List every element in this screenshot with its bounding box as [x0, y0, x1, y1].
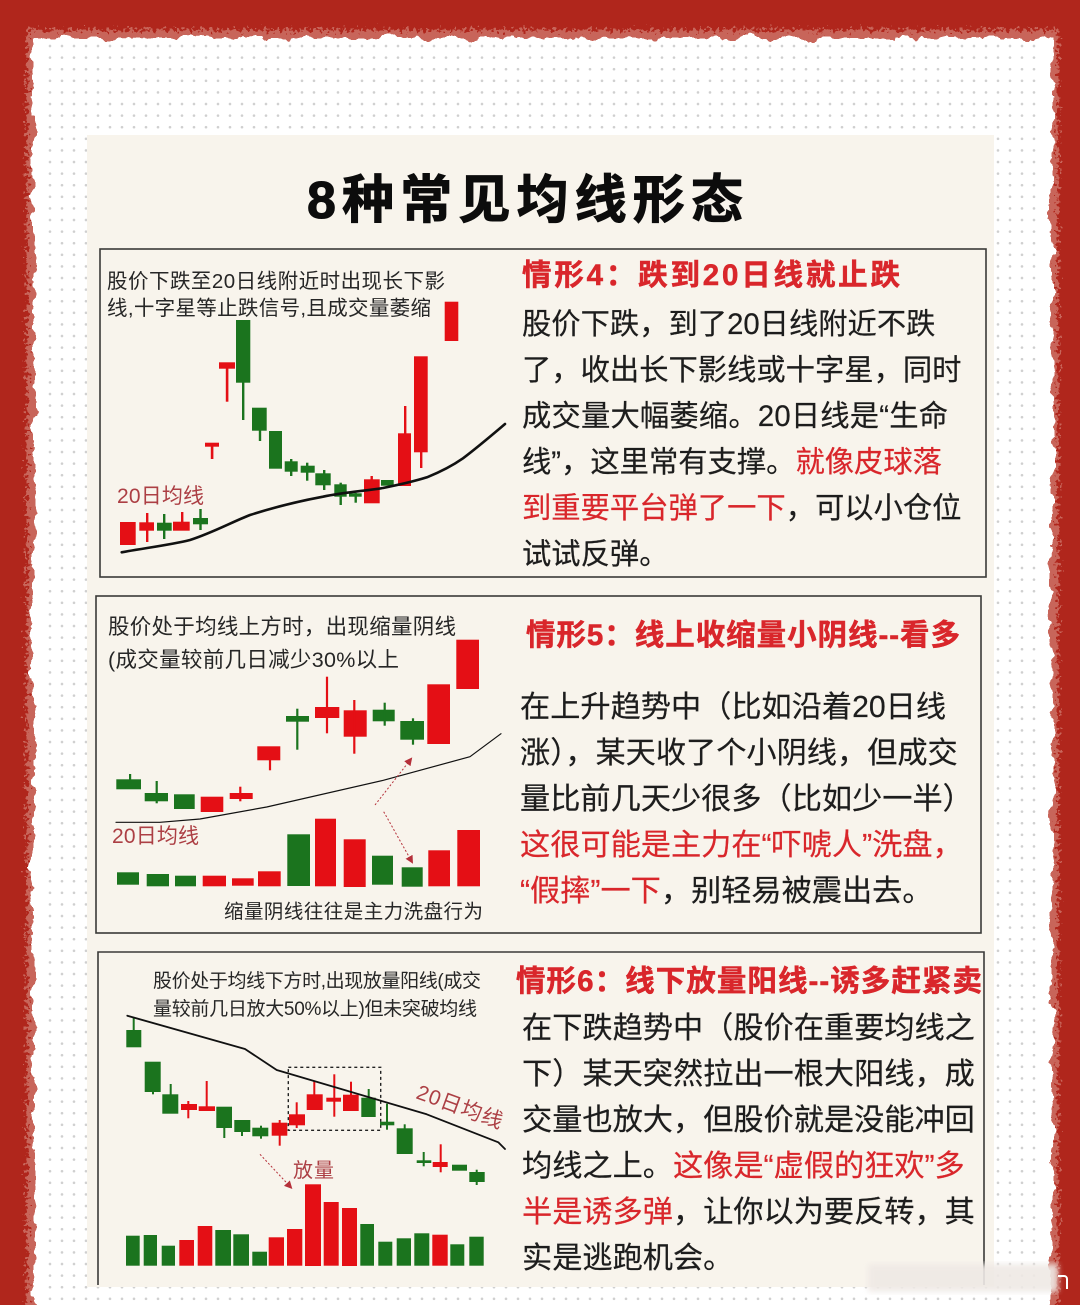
- chart note 5: 缩量阴线往往是主力洗盘行为: [224, 901, 483, 923]
- body text 4: 股价下跌，到了20日线附近不跌: [522, 308, 935, 341]
- body text 6: 在下跌趋势中（股价在重要均线之: [522, 1011, 975, 1045]
- heading 6: 情形6：线下放量阳线--诱多赶紧卖: [516, 965, 982, 998]
- body text 4: 试试反弹。: [522, 538, 668, 571]
- chart annotation 6: 量较前几日放大50%以上)但未突破均线: [153, 998, 477, 1020]
- moving average line 4: [122, 424, 505, 552]
- label: 20-day moving average: 20日均线: [112, 825, 199, 848]
- body text 6: 半是诱多弹，让你以为要反转，其: [522, 1195, 975, 1229]
- chart annotation 5: [108, 615, 456, 672]
- body text 4: 到重要平台弹了一下，可以小仓位: [522, 492, 961, 525]
- body text 5: 涨），某天收了个小阴线，但成交: [520, 736, 958, 770]
- volume bars 6: [126, 1184, 484, 1266]
- body text 4: 成交量大幅萎缩。20日线是“生命: [522, 400, 948, 433]
- body text 6: 实是逃跑机会。: [522, 1241, 733, 1275]
- body text 6: [522, 1011, 975, 1275]
- chart annotation 4: 线,十字星等止跌信号,且成交量萎缩: [107, 297, 431, 320]
- body text 4: [522, 308, 961, 571]
- blurred watermark strip: [868, 1264, 1067, 1292]
- chart annotation 5: (成交量较前几日减少30%以上: [108, 648, 399, 672]
- chart annotation 5: 股价处于均线上方时，出现缩量阴线: [108, 615, 456, 639]
- body text 5: 量比前几天少很多（比如少一半）: [520, 782, 973, 816]
- candlestick chart 5: [116, 640, 501, 822]
- panel: situation 4: [100, 249, 986, 577]
- cream content card: [87, 135, 994, 1287]
- moving average line 5: [116, 734, 501, 822]
- body text 5: “假摔”一下，别轻易被震出去。: [520, 874, 933, 908]
- body text 6: 下）某天突然拉出一根大阳线，成: [522, 1057, 975, 1091]
- title: 8种常见均线形态: [307, 172, 743, 230]
- panel: situation 5: [96, 596, 981, 933]
- moving average line 6: [127, 1016, 505, 1149]
- body text 4: 线”，这里常有支撑。就像皮球落: [522, 446, 942, 479]
- candlestick chart 4: [120, 302, 505, 552]
- candlestick chart 6: [126, 1016, 505, 1185]
- body text 5: 这很可能是主力在“吓唬人”洗盘，: [520, 828, 963, 862]
- dashed highlight box: [288, 1067, 381, 1130]
- label: 20-day moving average, rotated: 20日均线: [413, 1081, 506, 1133]
- body text 6: 交量也放大，但股价就是没能冲回: [522, 1103, 975, 1137]
- chart annotation 6: [153, 970, 481, 1020]
- chart annotation 6: 股价处于均线下方时,出现放量阳线(成交: [153, 970, 481, 992]
- arrow: to shrinking volume bar: [384, 812, 412, 862]
- body text 6: 均线之上。这像是“虚假的狂欢”多: [522, 1149, 965, 1183]
- heading 4: 情形4：跌到20日线就止跌: [522, 259, 900, 292]
- label: volume surge: 放量: [293, 1159, 334, 1182]
- volume bars 5: [117, 819, 480, 887]
- arrow: volume to candle: [375, 759, 411, 805]
- chart annotation 4: 股价下跌至20日线附近时出现长下影: [107, 270, 445, 293]
- body text 5: 在上升趋势中（比如沿着20日线: [520, 690, 946, 724]
- body text 5: [520, 690, 973, 908]
- arrow: volume surge: [260, 1154, 291, 1188]
- panel: situation 6: [98, 952, 984, 1285]
- chart annotation 4: [107, 270, 445, 320]
- body text 4: 了，收出长下影线或十字星，同时: [522, 354, 961, 387]
- heading 5: 情形5：线上收缩量小阴线--看多: [526, 619, 960, 652]
- label: 20-day moving average: 20日均线: [117, 485, 204, 508]
